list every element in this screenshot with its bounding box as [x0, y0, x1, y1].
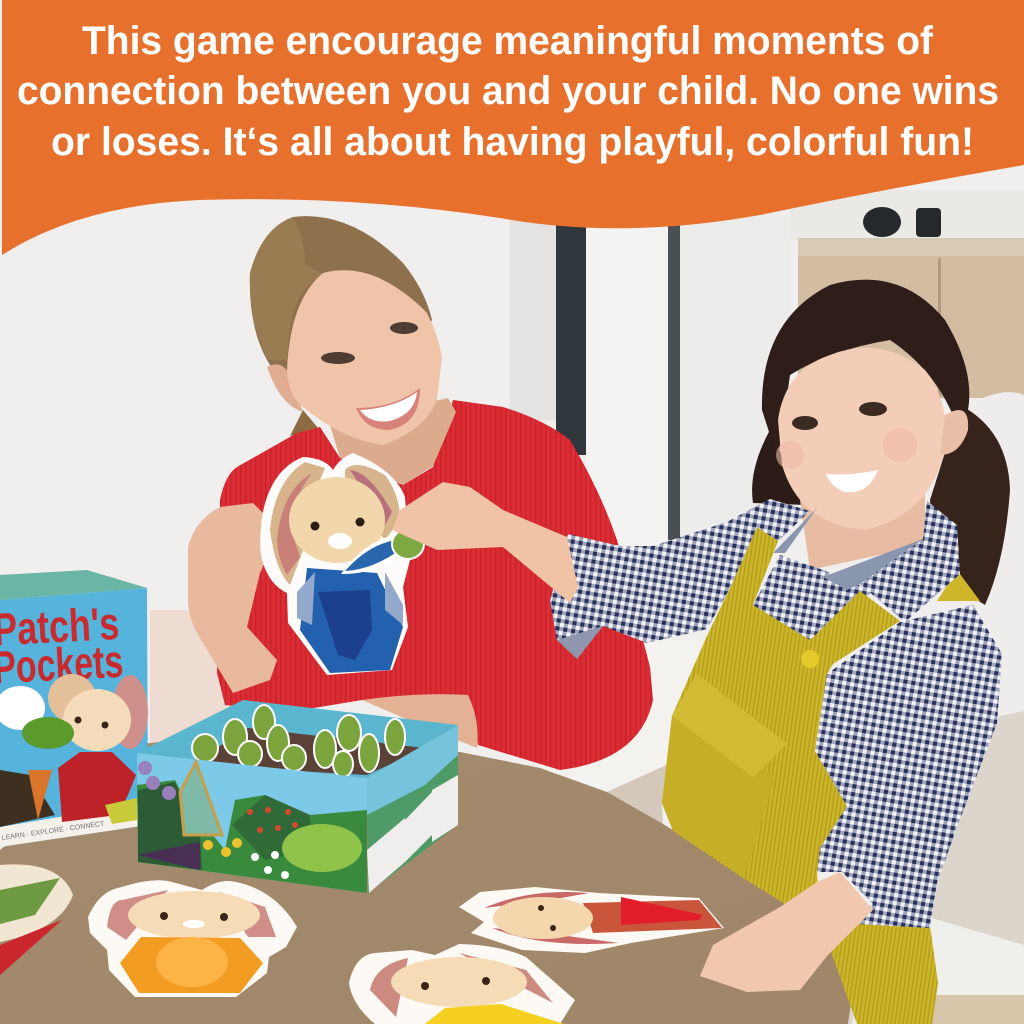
banner text: or loses. It‘s all about having playful, colorful fun! [51, 120, 974, 164]
banner text: This game encourage meaningful moments of [82, 19, 934, 63]
banner text [17, 19, 999, 164]
ear [267, 364, 303, 412]
eyes and mouth [792, 416, 818, 430]
table rim [848, 990, 856, 1024]
sleeve cuff [557, 626, 603, 659]
forearm [362, 694, 478, 748]
overalls bib [662, 527, 900, 915]
banner text: connection between you and your child. No one wins [17, 69, 999, 113]
box side [367, 725, 458, 893]
overalls pocket [662, 716, 775, 876]
white fence and gate [367, 775, 458, 893]
far overall strap [937, 570, 980, 601]
neck [330, 398, 456, 485]
child's lower arm and hand [700, 872, 873, 992]
pocket flap [672, 674, 787, 777]
orange rabbit card [88, 880, 297, 997]
lettuce tokens [192, 705, 405, 777]
speech bubble [0, 686, 45, 730]
right sleeve [815, 605, 1002, 928]
red rabbit card [459, 887, 724, 953]
collar right [860, 501, 960, 622]
box front [137, 753, 367, 893]
pigtails [752, 430, 805, 505]
outstretched hand and arm [392, 482, 578, 603]
game box: Patch's Pockets: LEARN · EXPLORE · CONNECT [1, 821, 105, 842]
shirt chest [753, 555, 873, 645]
eyes and smile [321, 352, 355, 364]
held rabbit card [260, 453, 424, 675]
table [0, 735, 853, 1024]
yellow rabbit card [349, 944, 575, 1024]
game insert box [137, 700, 458, 893]
woman [188, 216, 653, 770]
hair [250, 216, 432, 380]
game box: Patch's Pockets [0, 570, 148, 847]
box rabbit [22, 667, 148, 824]
neck [800, 490, 925, 570]
face [287, 270, 442, 445]
overall button [801, 650, 819, 668]
hair [762, 280, 969, 460]
face [778, 348, 946, 530]
child [550, 280, 1010, 1024]
left sleeve [550, 499, 810, 659]
plate with peas [0, 864, 73, 975]
lower overall legs [785, 904, 938, 1024]
holding hand and arm [188, 503, 277, 693]
ponytail [290, 410, 318, 436]
orange banner [2, 0, 1024, 255]
collar grey [773, 508, 923, 590]
red sweater [217, 400, 653, 770]
carrot token [341, 535, 400, 574]
